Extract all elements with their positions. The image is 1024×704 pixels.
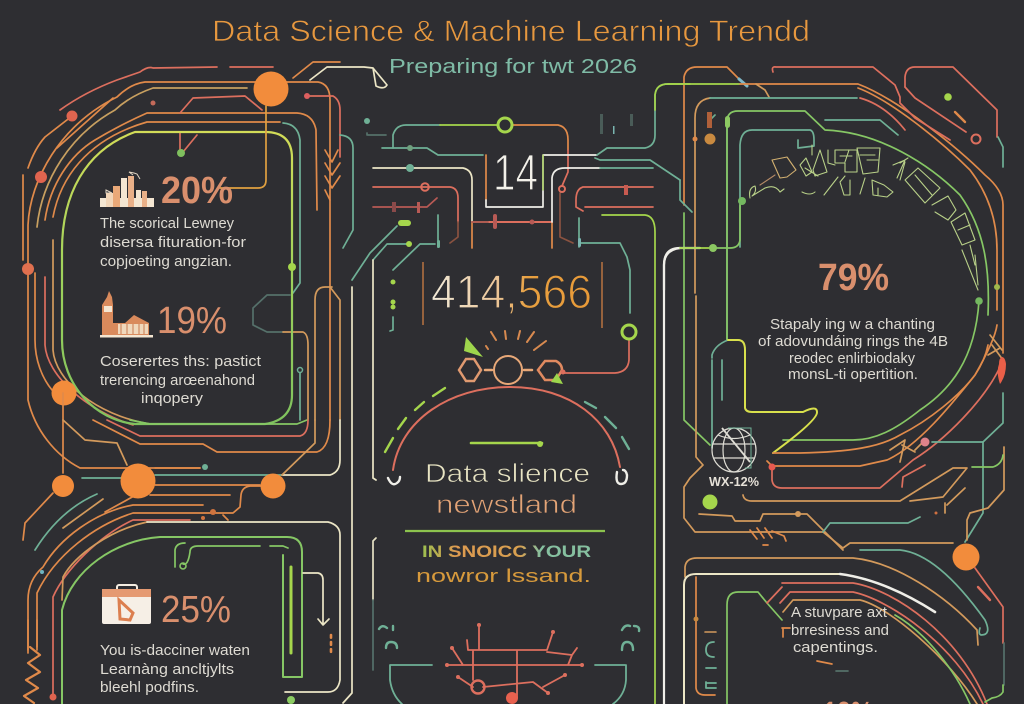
text block: first left stat: The scorical Lewney bbox=[100, 215, 234, 232]
node: lime dot bbox=[702, 494, 718, 510]
text block: lower right: brresiness and bbox=[791, 622, 889, 639]
vertical lime bar bbox=[290, 567, 292, 653]
stat: 20%: 20% bbox=[161, 170, 233, 212]
text block: first left stat bbox=[100, 215, 246, 270]
panel: right bottom traces bbox=[684, 550, 1004, 704]
bracket arrow bbox=[303, 573, 329, 625]
text block: second left stat: Coserertes ths: pastict bbox=[100, 353, 262, 370]
panel outline: left top bbox=[62, 132, 292, 424]
big number: 414,566 bbox=[431, 265, 592, 318]
text block: bottom left stat: Learnàng ancltjylts bbox=[100, 661, 234, 678]
text block: bottom left stat bbox=[100, 642, 250, 696]
subheading: IN SNOICC YOUR bbox=[422, 542, 591, 561]
orange dots bbox=[330, 635, 332, 656]
text block: bottom left stat: bleehl podfins. bbox=[100, 679, 199, 696]
label: WX-12%: WX-12% bbox=[709, 474, 759, 489]
panel outline: left bottom bbox=[62, 537, 302, 704]
icon: bar chart bbox=[100, 172, 154, 207]
text block: right stat: monsL-ti opertìtion. bbox=[788, 366, 918, 383]
orange arrow chevrons bbox=[750, 528, 786, 545]
panel: left bottom lines bbox=[23, 393, 340, 704]
connection nodes: left bottom bbox=[40, 464, 295, 704]
title: Data Science & Machine Learning Trendd bbox=[212, 15, 810, 48]
semicircle gauge bbox=[385, 387, 629, 484]
heading: data science: Data slience bbox=[425, 458, 590, 488]
side rails center bbox=[373, 248, 680, 704]
stat: 79%: 79% bbox=[818, 257, 889, 299]
panel: center circuit header bbox=[352, 84, 690, 704]
decorative arc of building outlines bbox=[750, 145, 978, 290]
text block: right stat: reodec enlirbiodaky bbox=[789, 350, 915, 367]
icon: globe bbox=[712, 428, 756, 472]
divider line bbox=[405, 530, 605, 532]
nodes: right top bbox=[692, 93, 1006, 517]
icon: building bbox=[100, 291, 153, 338]
text block: lower right bbox=[791, 604, 889, 656]
text block: bottom left stat: You is-dacciner waten bbox=[100, 642, 250, 659]
icon: gear nodes and rays bbox=[459, 331, 566, 384]
text block: second left stat bbox=[100, 353, 262, 407]
panel: right top traces bbox=[664, 67, 1004, 550]
connection nodes: left top bbox=[22, 72, 310, 406]
node accents bbox=[364, 114, 636, 339]
fishbone mark bbox=[24, 647, 40, 703]
panel: left top circuit lines and stats bbox=[23, 62, 387, 703]
traces between the left panels bbox=[23, 393, 340, 697]
stat: 25%: 25% bbox=[161, 589, 231, 631]
subheading: nowror lssand. bbox=[416, 566, 591, 586]
stat: 19%: 19% bbox=[157, 300, 227, 342]
text block: first left stat: copjoeting angzian. bbox=[100, 253, 232, 270]
fishbone near panel bbox=[988, 335, 1003, 360]
subheading bbox=[416, 542, 591, 586]
text block: second left stat: inqopery bbox=[141, 390, 204, 407]
circuit traces around left panel bbox=[23, 62, 387, 703]
outer traces bbox=[664, 67, 1004, 550]
subtitle: Preparing for twt 2026 bbox=[389, 56, 637, 78]
node: large orange circle bbox=[952, 544, 980, 570]
icon: briefcase bbox=[102, 585, 151, 624]
inner hooks bbox=[175, 543, 288, 567]
number: 14: 14 bbox=[493, 144, 538, 201]
text block: lower right: capentings. bbox=[793, 639, 878, 656]
text block: right stat: of adovundáing rings the 4B bbox=[758, 333, 948, 350]
network diagram bbox=[379, 623, 639, 704]
connector from big circle to stat bbox=[220, 106, 266, 188]
text block: first left stat: disersa fituration-for bbox=[100, 234, 246, 251]
text block: right stat bbox=[758, 316, 948, 383]
fishbone mark bbox=[325, 150, 340, 200]
text block: second left stat: trerencing arœenahond bbox=[100, 372, 255, 389]
top traces bbox=[352, 84, 690, 704]
heading: newsland: newstland bbox=[436, 489, 577, 519]
text block: right stat: Stapaly ing w a chanting bbox=[770, 316, 935, 333]
text block: lower right: A stuvpare axt bbox=[791, 604, 888, 621]
